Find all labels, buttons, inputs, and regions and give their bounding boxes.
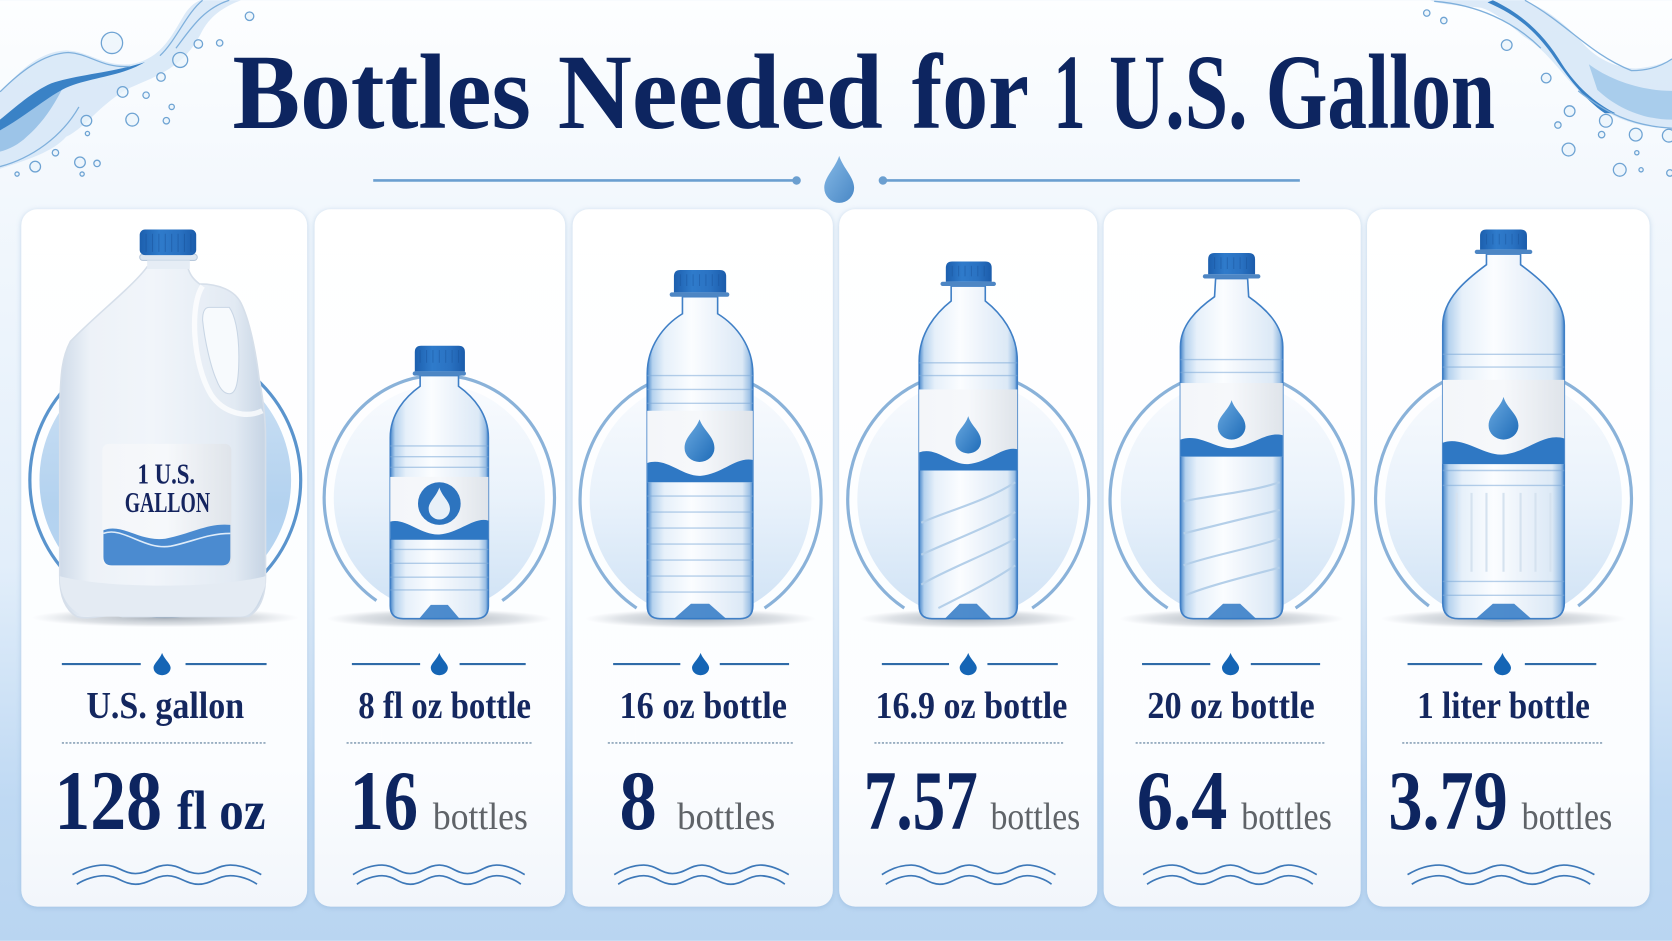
wave ornament [882, 865, 1055, 884]
wave ornament [1143, 865, 1317, 884]
title divider with drop [373, 156, 1300, 203]
backdrop circle [1110, 371, 1353, 618]
icon: 1 liter bottle [1443, 230, 1564, 619]
icon: 20 oz bottle [1180, 253, 1283, 619]
wave ornament [73, 865, 261, 884]
value: bottles [1522, 796, 1612, 838]
value: bottles [677, 796, 775, 838]
title: 1 [1054, 34, 1086, 152]
value: 16 [350, 755, 418, 848]
bottle name: 20 oz bottle [1147, 685, 1315, 727]
card background [21, 209, 307, 907]
value [54, 755, 266, 848]
divider with drop [1408, 653, 1596, 675]
bubbles right [1424, 10, 1672, 176]
floor shadow [327, 609, 551, 628]
water splash top left [0, 0, 254, 176]
divider with drop [352, 653, 526, 675]
divider with drop [1142, 653, 1320, 675]
floor shadow [1120, 609, 1344, 628]
panel: 16 oz bottle [573, 209, 833, 907]
bottle cap [946, 262, 992, 282]
title: U.S. [1109, 34, 1248, 152]
backdrop circle [1376, 366, 1631, 622]
value: 7.57 [864, 755, 978, 848]
value: fl oz [177, 780, 266, 841]
value: 8 [620, 755, 657, 848]
jug label: 1 U.S. [138, 458, 195, 490]
panel: 16.9 oz bottle [839, 209, 1097, 907]
wave ornament [614, 865, 789, 884]
backdrop circle [30, 344, 301, 617]
bottle cap [415, 346, 465, 371]
icon: gallon jug [60, 230, 266, 618]
value [620, 755, 775, 848]
title: Needed [558, 34, 883, 152]
value: bottles [433, 796, 528, 838]
wave ornament [353, 865, 525, 884]
bottle name: 16 oz bottle [620, 685, 787, 727]
panel: U.S. gallon [21, 209, 307, 907]
card background [839, 209, 1097, 907]
title: for [912, 34, 1029, 152]
title [232, 34, 1495, 152]
bottle cap [674, 270, 726, 292]
wave ornament [1408, 865, 1594, 884]
card background [1104, 209, 1361, 907]
bottle cap [1208, 253, 1255, 274]
title: Gallon [1266, 34, 1495, 152]
value [350, 755, 528, 848]
value [1137, 755, 1332, 848]
floor shadow [585, 609, 816, 628]
jug handle opening [203, 307, 239, 394]
divider with drop [613, 653, 789, 675]
backdrop circle [580, 372, 821, 618]
bottle name: U.S. gallon [86, 685, 244, 727]
panel: 1 liter bottle [1367, 209, 1650, 907]
jug label: GALLON [125, 487, 210, 519]
value: bottles [991, 796, 1080, 838]
bottle name: 16.9 oz bottle [875, 685, 1067, 727]
value: 128 [54, 755, 162, 848]
icon: 16 oz bottle [647, 270, 753, 619]
jug label [102, 444, 231, 566]
bottle name: 1 liter bottle [1417, 685, 1590, 727]
panel: 8 fl oz bottle [315, 209, 565, 907]
icon: 16.9 oz bottle [919, 262, 1017, 619]
water splash top right [1424, 0, 1672, 176]
bottle name: 8 fl oz bottle [358, 685, 531, 727]
value: bottles [1241, 796, 1332, 838]
value: 3.79 [1388, 755, 1508, 848]
floor shadow [1381, 609, 1626, 628]
floor shadow [32, 608, 299, 627]
value [864, 755, 1080, 848]
backdrop circle [324, 375, 554, 611]
bottle cap [1480, 230, 1527, 250]
card background [1367, 209, 1650, 907]
backdrop circle [848, 372, 1089, 618]
panel: 20 oz bottle [1104, 209, 1361, 907]
floor shadow [859, 609, 1077, 628]
divider with drop [62, 653, 267, 675]
title: Bottles [232, 34, 531, 152]
divider with drop [882, 653, 1058, 675]
card background [315, 209, 565, 907]
icon: jug cap [140, 230, 196, 255]
value [1388, 755, 1612, 848]
icon: 8 oz bottle [390, 346, 488, 619]
value: 6.4 [1137, 755, 1227, 848]
bubbles left [15, 12, 254, 176]
card background [573, 209, 833, 907]
